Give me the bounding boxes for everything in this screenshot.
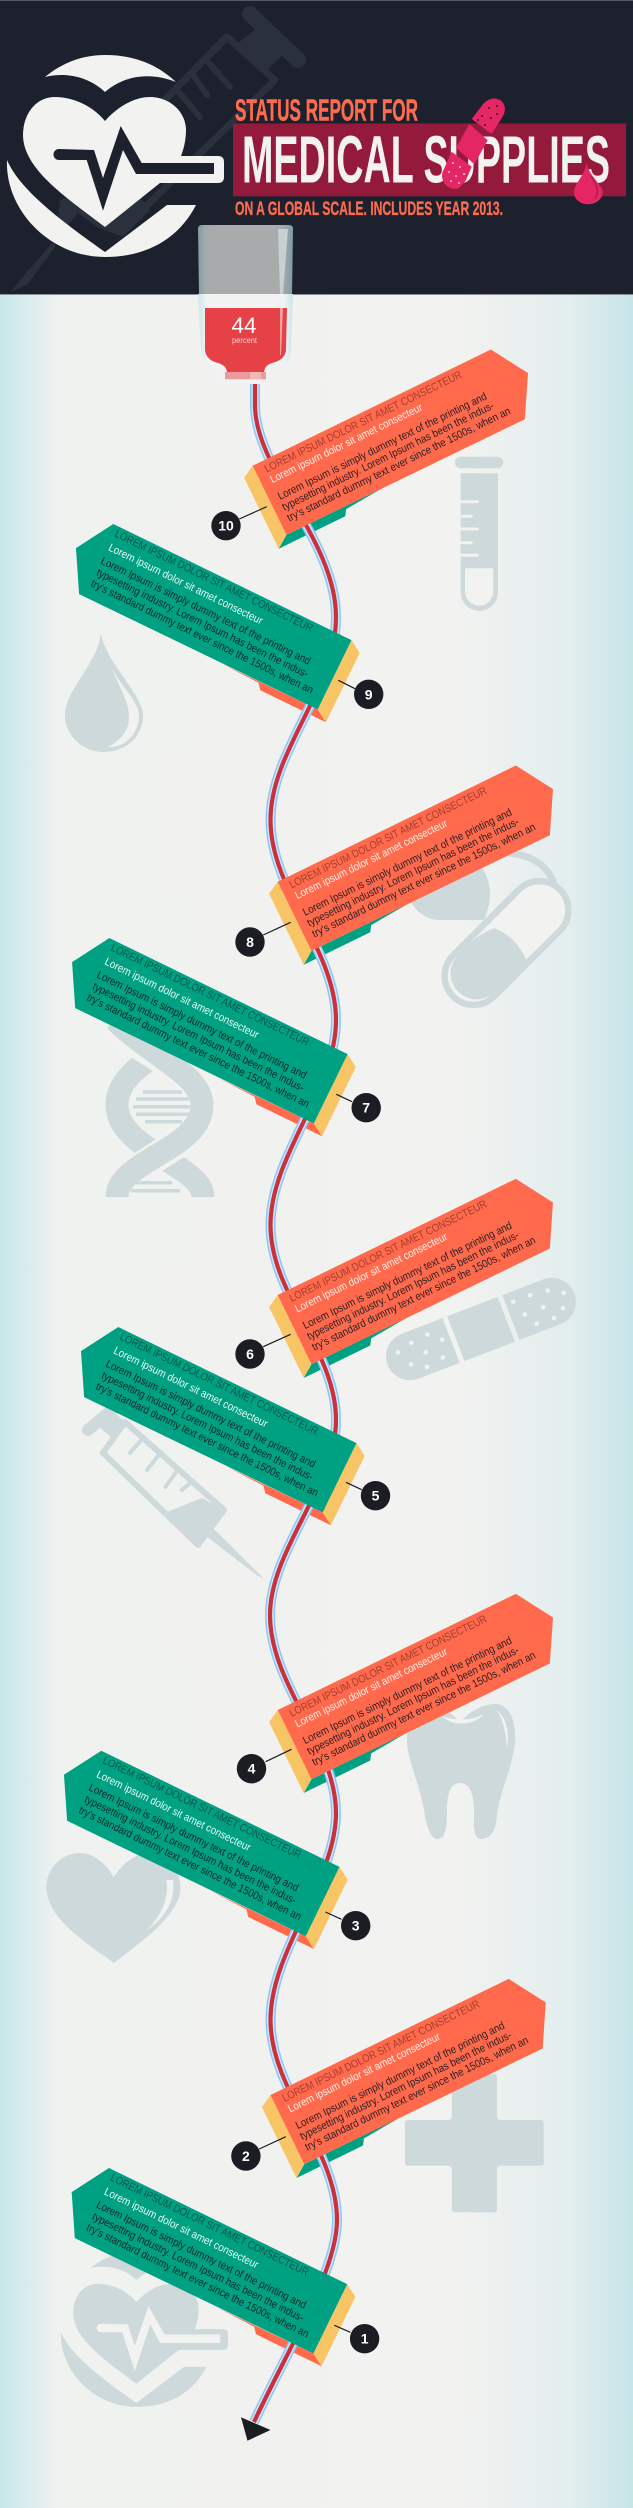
panel 8: typesetting industry. Lorem Ipsum has been the indus-	[305, 816, 521, 929]
panel 4: Lorem Ipsum is simply dummy text of the printing and	[301, 1635, 514, 1747]
panel 7: Lorem Ipsum is simply dummy text of the printing and	[95, 969, 309, 1082]
panel 9: Lorem Ipsum is simply dummy text of the printing and	[99, 555, 312, 668]
panel 5	[60, 1317, 368, 1525]
panel 1: try's standard dummy text ever since the 1500s, when an	[84, 2222, 311, 2340]
panel 2: typesetting industry. Lorem Ipsum has been the indus-	[298, 2029, 514, 2143]
panel 4	[266, 1584, 574, 1793]
number 5: 5	[372, 1488, 380, 1504]
panel 8: try's standard dummy text ever since the 1500s, when an	[310, 821, 538, 940]
panel 6: Lorem ipsum dolor sit amet consecteur	[293, 1231, 450, 1315]
panel 10: Lorem ipsum dolor sit amet consecteur	[268, 401, 425, 486]
panel 1: Lorem ipsum dolor sit amet consecteur	[102, 2186, 260, 2271]
panel 1	[51, 2158, 359, 2366]
panel 2: LOREM IPSUM DOLOR SIT AMET CONSECTEUR	[281, 1998, 482, 2105]
blood bag: 44	[232, 313, 256, 338]
number 6	[235, 1334, 291, 1369]
panel 9: typesetting industry. Lorem Ipsum has been the indus-	[94, 567, 310, 680]
panel 8: LOREM IPSUM DOLOR SIT AMET CONSECTEUR	[288, 785, 489, 891]
number 8	[235, 922, 291, 957]
number 3: 3	[352, 1918, 360, 1934]
icon: pink bandage	[442, 99, 505, 189]
panel 3: typesetting industry. Lorem Ipsum has been the indus-	[82, 1794, 298, 1907]
panel 1: LOREM IPSUM DOLOR SIT AMET CONSECTEUR	[108, 2172, 311, 2279]
panel 4: try's standard dummy text ever since the 1500s, when an	[310, 1650, 538, 1769]
number 2: 2	[242, 2148, 250, 2164]
icon: dna watermark	[110, 1020, 203, 1197]
panel 10: Lorem Ipsum is simply dummy text of the printing and	[276, 391, 489, 503]
panel 6: typesetting industry. Lorem Ipsum has been the indus-	[305, 1229, 521, 1343]
panel 5: Lorem ipsum dolor sit amet consecteur	[111, 1345, 270, 1430]
icon: test tube watermark	[455, 457, 503, 611]
icon: drop watermark	[65, 633, 143, 752]
panel 5: try's standard dummy text ever since the 1500s, when an	[94, 1381, 320, 1499]
panel 6: try's standard dummy text ever since the 1500s, when an	[310, 1235, 538, 1354]
number 7: 7	[362, 1100, 370, 1116]
blood bag	[198, 225, 293, 384]
panel 9: Lorem ipsum dolor sit amet consecteur	[106, 542, 265, 627]
panel 8	[266, 755, 574, 965]
icon: pink drop	[574, 163, 603, 204]
header band	[0, 0, 633, 295]
panel 1: Lorem Ipsum is simply dummy text of the printing and	[94, 2199, 308, 2312]
panel 9: try's standard dummy text ever since the 1500s, when an	[89, 578, 315, 696]
panel 5: LOREM IPSUM DOLOR SIT AMET CONSECTEUR	[118, 1331, 320, 1438]
panel 7: Lorem ipsum dolor sit amet consecteur	[103, 956, 261, 1041]
number 5	[346, 1481, 390, 1510]
panel 7: typesetting industry. Lorem Ipsum has been the indus-	[90, 981, 306, 1094]
number 1	[334, 2324, 379, 2353]
panel 10: LOREM IPSUM DOLOR SIT AMET CONSECTEUR	[263, 369, 464, 475]
icon: bandage watermark	[379, 1271, 583, 1387]
icon: heart logo	[7, 55, 224, 257]
panel 4: Lorem ipsum dolor sit amet consecteur	[293, 1646, 450, 1730]
number 1: 1	[361, 2331, 369, 2347]
icon: logo watermark	[61, 2251, 228, 2407]
blood bag: percent	[232, 335, 258, 345]
panel 9: LOREM IPSUM DOLOR SIT AMET CONSECTEUR	[113, 528, 315, 635]
panel 2: try's standard dummy text ever since the 1500s, when an	[303, 2035, 530, 2154]
icon: tooth watermark	[407, 1704, 515, 1839]
panel 3: Lorem Ipsum is simply dummy text of the printing and	[87, 1782, 300, 1894]
panel 4: LOREM IPSUM DOLOR SIT AMET CONSECTEUR	[288, 1613, 489, 1720]
number 10: 10	[218, 518, 234, 534]
panel 8: Lorem ipsum dolor sit amet consecteur	[293, 817, 450, 902]
number 8: 8	[246, 934, 254, 950]
panel 6	[266, 1169, 574, 1378]
panel 3: try's standard dummy text ever since the 1500s, when an	[77, 1805, 303, 1923]
panel 2: Lorem Ipsum is simply dummy text of the printing and	[294, 2020, 507, 2132]
panel 10	[241, 339, 549, 549]
panel 3	[43, 1741, 351, 1949]
number 2	[231, 2137, 286, 2171]
number 4: 4	[248, 1761, 256, 1777]
heading: status report for: STATUS REPORT FOR	[235, 92, 418, 128]
number 7	[336, 1093, 381, 1122]
panel 7: LOREM IPSUM DOLOR SIT AMET CONSECTEUR	[109, 942, 311, 1049]
icon: pills watermark	[405, 853, 580, 1017]
icon: heart watermark	[46, 1853, 180, 1963]
panel 6: Lorem Ipsum is simply dummy text of the printing and	[301, 1220, 514, 1332]
panel 7: try's standard dummy text ever since the 1500s, when an	[85, 992, 311, 1110]
panel 7	[51, 928, 359, 1136]
panel 3: Lorem ipsum dolor sit amet consecteur	[94, 1769, 253, 1854]
panel 2	[259, 1969, 567, 2178]
panel 9	[55, 514, 363, 722]
icon: syringe watermark	[88, 1405, 264, 1579]
blood tube	[254, 383, 337, 2422]
arrowhead	[241, 2417, 270, 2441]
panel 8: Lorem Ipsum is simply dummy text of the printing and	[301, 807, 514, 919]
icon: cross watermark	[405, 2074, 544, 2212]
panel 6: LOREM IPSUM DOLOR SIT AMET CONSECTEUR	[288, 1198, 489, 1305]
panel 5: typesetting industry. Lorem Ipsum has been the indus-	[99, 1370, 315, 1483]
panel 4: typesetting industry. Lorem Ipsum has been the indus-	[305, 1644, 521, 1758]
number 9: 9	[365, 686, 373, 702]
number 9	[338, 680, 383, 709]
number 3	[325, 1911, 370, 1940]
number 4	[237, 1749, 292, 1783]
panel 2: Lorem ipsum dolor sit amet consecteur	[286, 2031, 443, 2115]
panel 1: typesetting industry. Lorem Ipsum has been the indus-	[90, 2211, 306, 2324]
panel 3: LOREM IPSUM DOLOR SIT AMET CONSECTEUR	[101, 1755, 303, 1861]
panel 10: try's standard dummy text ever since the 1500s, when an	[285, 405, 513, 524]
panel 5: Lorem Ipsum is simply dummy text of the printing and	[104, 1358, 317, 1471]
icon: header syringe watermark	[10, 14, 298, 292]
number 10	[211, 507, 267, 540]
panel 10: typesetting industry. Lorem Ipsum has been the indus-	[280, 400, 496, 513]
number 6: 6	[246, 1346, 254, 1362]
panel folds underneath the tube	[206, 488, 412, 2366]
